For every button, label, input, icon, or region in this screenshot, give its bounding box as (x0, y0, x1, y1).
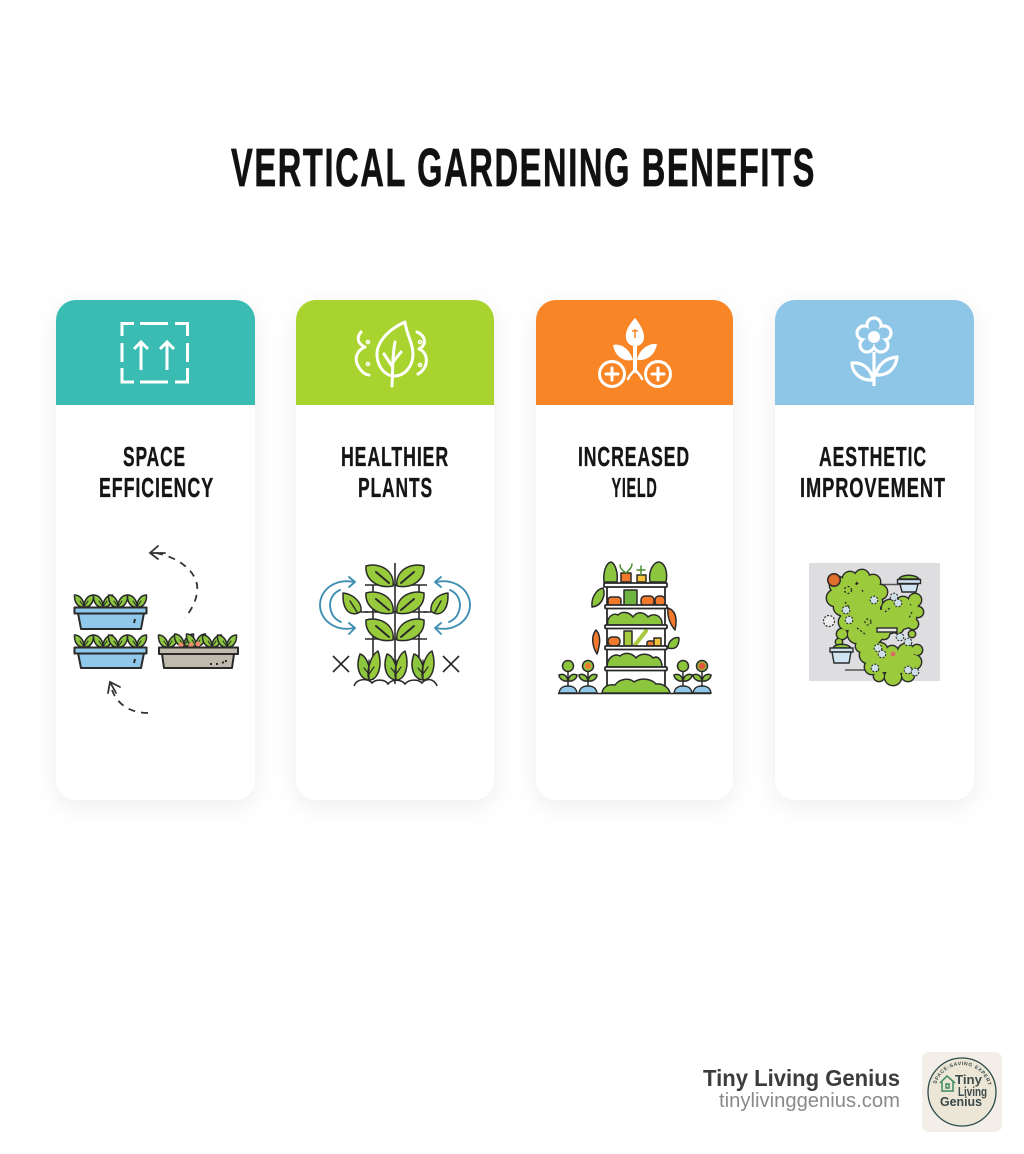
shelves lines (845, 584, 900, 670)
badge wordmark (940, 1072, 987, 1109)
green produce (592, 562, 679, 693)
header band: sky blue (775, 300, 974, 405)
icon: flower (852, 318, 897, 386)
heading: space efficiency: SPACE (123, 441, 186, 472)
branding text (703, 1065, 900, 1112)
posts (607, 585, 665, 693)
branding text: Tiny Living Genius (703, 1065, 900, 1091)
icon: expand with up arrows (122, 324, 188, 382)
panel: aesthetic improvement (775, 300, 974, 800)
heading: space efficiency: EFFICIENCY (99, 472, 214, 503)
badge wordmark: Living (958, 1084, 987, 1099)
airflow arrows (320, 577, 470, 634)
icon: leaf with airflow (356, 322, 426, 386)
panel: space efficiency (56, 300, 255, 800)
heading: increased yield (578, 441, 690, 503)
small planters (830, 575, 920, 663)
white flower (824, 616, 834, 626)
arrow: dashed top (156, 553, 197, 618)
header band: teal (56, 300, 255, 405)
heading: aesthetic improvement: IMPROVEMENT (800, 472, 946, 503)
pink accent (890, 652, 896, 656)
side leaves (343, 593, 448, 614)
yellow produce and sprouts (620, 564, 661, 646)
foliage (827, 570, 923, 685)
header band: lime (296, 300, 494, 405)
heading: healthier plants: PLANTS (358, 472, 433, 503)
seedlings (74, 595, 237, 648)
x marks (333, 656, 459, 672)
heading: aesthetic improvement (800, 441, 946, 503)
illustration: trellised plant with airflow (320, 563, 470, 686)
illustration: living green wall (809, 563, 940, 685)
arrowhead top (150, 546, 165, 559)
trellis (365, 563, 427, 684)
pale flowers (842, 593, 919, 676)
logo badge (922, 1052, 1002, 1132)
badge wordmark: Genius (940, 1094, 982, 1109)
branding text: tinylivinggenius.com (719, 1090, 900, 1112)
panel: increased yield (536, 300, 733, 800)
wall backdrop (809, 563, 940, 681)
foliage spots (844, 586, 912, 634)
illustration: stacked planters vs. ground planter (74, 546, 238, 713)
heading: increased yield: YIELD (612, 472, 658, 503)
bottom seedlings (358, 651, 434, 680)
soil (354, 680, 437, 686)
ground plants (558, 660, 711, 694)
heading: healthier plants (341, 441, 449, 503)
arrow: dashed bottom (112, 690, 148, 713)
badge house icon (940, 1076, 955, 1091)
heading: aesthetic improvement: AESTHETIC (819, 441, 927, 472)
arrowhead bottom (108, 682, 120, 693)
heading: healthier plants: HEALTHIER (341, 441, 449, 472)
shelves (604, 583, 667, 670)
illustration: vegetable tower (558, 562, 711, 694)
badge arc text: SPACE-SAVING EXPERT (933, 1062, 992, 1085)
planters (74, 608, 238, 668)
header band: orange (536, 300, 733, 405)
red flower (827, 573, 841, 587)
heading: space efficiency (99, 441, 214, 503)
badge wordmark: Tiny (955, 1072, 983, 1087)
large leaves (366, 565, 424, 641)
heading: increased yield: INCREASED (578, 441, 690, 472)
icon: sprout with plus circles (600, 318, 670, 386)
panel: healthier plants (296, 300, 494, 800)
orange produce (593, 573, 676, 654)
